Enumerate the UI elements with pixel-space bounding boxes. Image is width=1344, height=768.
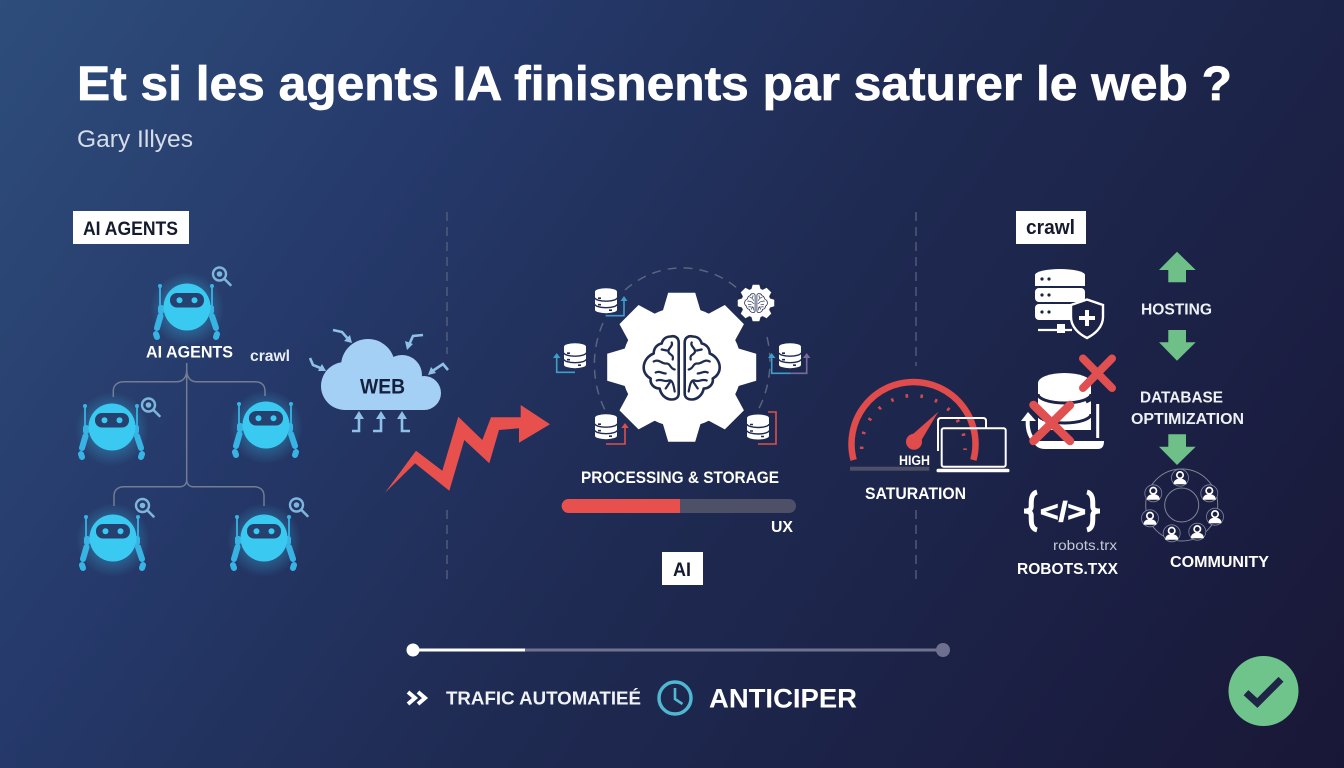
processing label: PROCESSING & STORAGE	[581, 469, 779, 487]
icon: database top left	[595, 288, 628, 316]
label: crawl box	[1016, 211, 1086, 244]
gauge baseline	[850, 467, 929, 471]
arrow: green down	[1159, 330, 1196, 361]
saturation label: SATURATION	[865, 485, 966, 503]
icon: code brackets: </>	[1040, 496, 1086, 527]
database optimization label	[1131, 390, 1244, 428]
community label: COMMUNITY	[1170, 554, 1269, 571]
icon: central gear with brain	[607, 293, 756, 442]
progress bar	[562, 499, 796, 513]
database optimization label: OPTIMIZATION	[1131, 411, 1244, 428]
icon: laptops	[937, 418, 1009, 472]
icon: web cloud	[310, 330, 448, 431]
label: AI box: AI	[673, 560, 691, 581]
panel: AI agents	[73, 211, 308, 577]
icon: database right	[768, 343, 810, 373]
panel: saturation gauge	[850, 382, 1009, 503]
gauge needle	[906, 412, 938, 450]
robots.trx caption: robots.trx	[1053, 537, 1117, 553]
arrow: green down to community	[1159, 434, 1196, 465]
anticipate label: ANTICIPER	[709, 684, 857, 714]
icon: database bottom right	[747, 412, 776, 444]
title: Et si les agents IA finisnents par saturer le web ?	[77, 58, 1232, 111]
arrow: red traffic surge	[385, 405, 550, 493]
icon: database left	[553, 343, 586, 372]
robots.txx label: ROBOTS.TXX	[1017, 561, 1118, 578]
database optimization label: DATABASE	[1140, 390, 1223, 406]
icon: robot right	[229, 390, 303, 464]
icon: robot left	[75, 392, 160, 466]
subtitle: author: Gary Illyes	[77, 126, 193, 153]
label: AI box	[662, 552, 703, 585]
icon: secure server	[1035, 269, 1103, 338]
icon: clock	[659, 682, 691, 714]
icon: small gear with brain	[737, 284, 775, 322]
icon: double chevron	[408, 692, 425, 704]
lead agent label: AI AGENTS	[146, 344, 233, 362]
UX label: UX	[771, 519, 793, 536]
crawl label: crawl	[250, 348, 290, 365]
label: crawl box: crawl	[1026, 217, 1075, 239]
icon: web cloud: WEB	[360, 376, 405, 398]
automated traffic label: TRAFIC AUTOMATIEÉ	[446, 688, 641, 708]
icon: lead robot	[150, 268, 230, 346]
hosting label: HOSTING	[1141, 302, 1212, 318]
timeline	[406, 643, 950, 657]
icon: database with errors	[1021, 358, 1112, 449]
icon: code brackets	[1024, 492, 1100, 530]
panel: processing and storage	[553, 268, 810, 585]
label: AI AGENTS box: AI AGENTS	[83, 219, 178, 240]
HIGH label: HIGH	[899, 453, 930, 468]
icon: robot bottom right	[227, 498, 308, 577]
dashed orbit	[594, 268, 770, 412]
gauge arc	[852, 382, 976, 460]
agent hierarchy connectors	[113, 363, 265, 506]
arrow: green up	[1159, 252, 1196, 282]
icon: check badge	[1228, 656, 1298, 726]
icon: robot bottom left	[76, 499, 154, 577]
label: AI AGENTS box	[73, 211, 189, 244]
icon: community ring	[1142, 469, 1224, 542]
panel: crawl solutions	[1016, 211, 1269, 578]
icon: database bottom left	[595, 414, 629, 444]
gauge ticks	[862, 396, 965, 450]
